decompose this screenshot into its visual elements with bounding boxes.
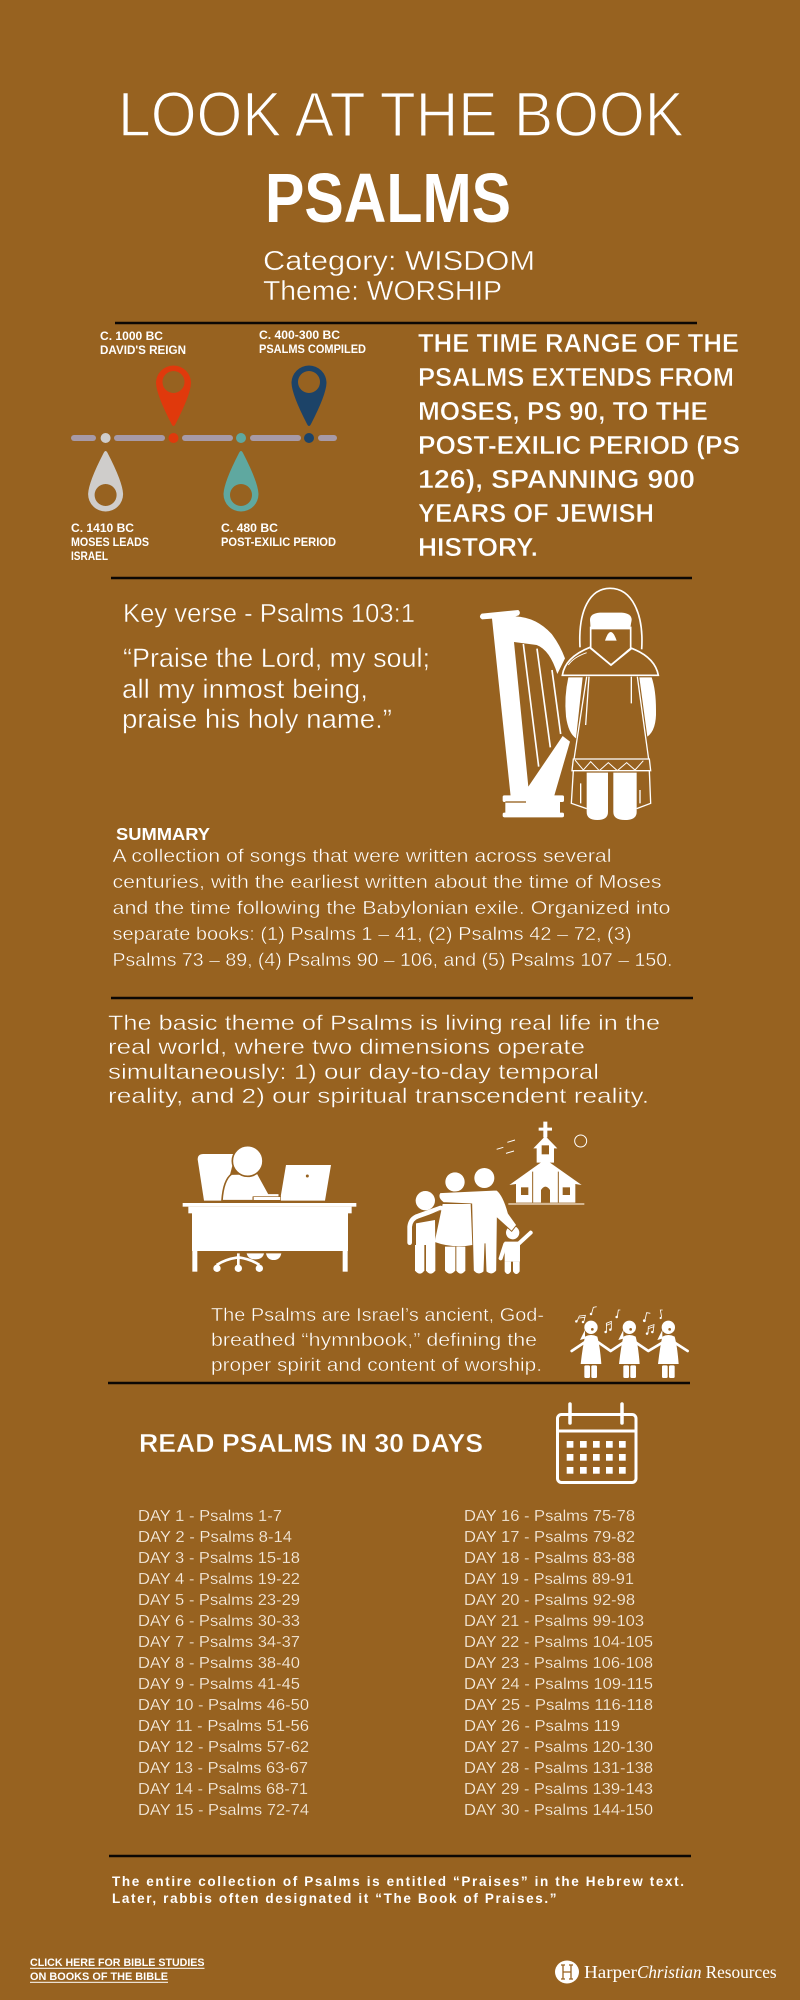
- closing note: Later, rabbis often designated it “The Book of Praises.”: [112, 1891, 556, 1906]
- pin: post-exilic period: [224, 451, 258, 512]
- label: c. 480 bc: POST-EXILIC PERIOD: [221, 537, 336, 549]
- text block: time range: [418, 330, 740, 562]
- closing note: The entire collection of Psalms is entitled “Praises” in the Hebrew text.: [112, 1874, 684, 1889]
- icon: family and church: [410, 1122, 587, 1274]
- panel: timeline: [71, 330, 366, 563]
- summary text: Psalms 73 – 89, (4) Psalms 90 – 106, and (5) Psalms 107 – 150.: [112, 949, 672, 970]
- text block: time range: THE TIME RANGE OF THE: [418, 330, 739, 358]
- timeline bar: [74, 435, 334, 441]
- link: bible studies: ON BOOKS OF THE BIBLE: [30, 1971, 168, 1983]
- reading plan: days 1 to 15: DAY 11 - Psalms 51-56: [138, 1718, 309, 1735]
- reading plan: days 16 to 30: DAY 30 - Psalms 144-150: [464, 1802, 653, 1819]
- label: c. 1410 bc: MOSES LEADS: [71, 537, 149, 549]
- text block: time range: PSALMS EXTENDS FROM: [418, 364, 734, 392]
- key verse quote: [122, 643, 430, 734]
- reading plan: days 1 to 15: DAY 3 - Psalms 15-18: [138, 1550, 300, 1567]
- reading plan: days 1 to 15: DAY 14 - Psalms 68-71: [138, 1781, 308, 1798]
- text block: ancient hymnbook: proper spirit and content of worship.: [211, 1354, 542, 1375]
- reading plan: days 1 to 15: DAY 4 - Psalms 19-22: [138, 1571, 300, 1588]
- summary heading: SUMMARY: [116, 824, 210, 844]
- music notes: [575, 1307, 663, 1334]
- text block: time range: 126), SPANNING 900: [418, 466, 695, 494]
- text block: time range: MOSES, PS 90, TO THE: [418, 398, 708, 426]
- text block: ancient hymnbook: [211, 1304, 544, 1375]
- heading: psalms: PSALMS: [265, 159, 511, 237]
- harp: [480, 610, 570, 817]
- reading plan: days 16 to 30: DAY 28 - Psalms 131-138: [464, 1760, 653, 1777]
- logo: harpercollins christian resources: [555, 1960, 777, 1984]
- label: c. 480 bc: C. 480 BC: [221, 523, 278, 535]
- reading plan: days 16 to 30: DAY 18 - Psalms 83-88: [464, 1550, 635, 1567]
- reading plan: days 1 to 15: DAY 15 - Psalms 72-74: [138, 1802, 309, 1819]
- pin: david's reign: [156, 366, 191, 426]
- label: c. 1410 bc: C. 1410 BC: [71, 523, 134, 535]
- link: bible studies: [30, 1957, 204, 1983]
- label: c. 1410 bc: [71, 523, 149, 563]
- reading plan: days 16 to 30: DAY 20 - Psalms 92-98: [464, 1592, 635, 1609]
- reading plan: days 16 to 30: DAY 27 - Psalms 120-130: [464, 1739, 653, 1756]
- text block: time range: YEARS OF JEWISH: [418, 500, 654, 528]
- icon: person at desk: [183, 1146, 356, 1272]
- logo: harpercollins christian resources: Harper: [584, 1962, 637, 1982]
- label: c. 1410 bc: ISRAEL: [71, 551, 108, 563]
- label: c. 1000 bc: [100, 331, 186, 357]
- reading plan: days 16 to 30: DAY 23 - Psalms 106-108: [464, 1655, 653, 1672]
- reading plan: days 1 to 15: DAY 1 - Psalms 1-7: [138, 1508, 282, 1525]
- summary text: [112, 845, 672, 970]
- text block: basic theme: simultaneously: 1) our day-to-day temporal: [108, 1061, 599, 1084]
- figure: [562, 588, 658, 820]
- reading plan: days 16 to 30: DAY 24 - Psalms 109-115: [464, 1676, 653, 1693]
- pin: moses leads israel: [88, 451, 123, 512]
- reading plan: days 1 to 15: DAY 13 - Psalms 63-67: [138, 1760, 308, 1777]
- reading plan: days 16 to 30: DAY 25 - Psalms 116-118: [464, 1697, 653, 1714]
- label: c. 400-300 bc: C. 400-300 BC: [259, 330, 340, 342]
- key verse heading: Key verse - Psalms 103:1: [123, 600, 415, 628]
- closing note: [112, 1874, 684, 1906]
- family: [410, 1168, 531, 1274]
- category and theme: Theme: WORSHIP: [263, 275, 502, 306]
- key verse quote: “Praise the Lord, my soul;: [123, 643, 430, 673]
- key verse quote: praise his holy name.”: [122, 704, 392, 734]
- reading plan: days 16 to 30: DAY 19 - Psalms 89-91: [464, 1571, 634, 1588]
- category and theme: [263, 245, 535, 306]
- text block: basic theme: real world, where two dimensions operate: [108, 1036, 585, 1059]
- reading plan: days 16 to 30: DAY 22 - Psalms 104-105: [464, 1634, 653, 1651]
- reading plan: days 1 to 15: DAY 5 - Psalms 23-29: [138, 1592, 300, 1609]
- label: c. 1000 bc: C. 1000 BC: [100, 331, 163, 343]
- reading plan: days 1 to 15: DAY 12 - Psalms 57-62: [138, 1739, 309, 1756]
- label: c. 1000 bc: DAVID'S REIGN: [100, 345, 186, 357]
- label: c. 480 bc: [221, 523, 336, 549]
- text block: time range: POST-EXILIC PERIOD (PS: [418, 432, 740, 460]
- reading plan: days 1 to 15: DAY 7 - Psalms 34-37: [138, 1634, 300, 1651]
- category and theme: Category: WISDOM: [263, 245, 535, 276]
- church: [497, 1122, 584, 1205]
- reading plan: days 16 to 30: [464, 1508, 653, 1819]
- reading plan: days 16 to 30: DAY 17 - Psalms 79-82: [464, 1529, 635, 1546]
- logo: harpercollins christian resources: Christian: [637, 1962, 702, 1982]
- reading plan: days 16 to 30: DAY 16 - Psalms 75-78: [464, 1508, 635, 1525]
- reading plan: days 16 to 30: DAY 21 - Psalms 99-103: [464, 1613, 644, 1630]
- icon: three singers: [572, 1307, 688, 1378]
- reading plan: days 1 to 15: DAY 2 - Psalms 8-14: [138, 1529, 292, 1546]
- reading plan: days 1 to 15: DAY 9 - Psalms 41-45: [138, 1676, 300, 1693]
- summary text: A collection of songs that were written across several: [112, 845, 612, 866]
- summary text: centuries, with the earliest written about the time of Moses: [112, 871, 662, 892]
- reading plan: days 1 to 15: DAY 6 - Psalms 30-33: [138, 1613, 300, 1630]
- key verse quote: all my inmost being,: [122, 674, 368, 704]
- label: c. 400-300 bc: [259, 330, 366, 356]
- summary text: separate books: (1) Psalms 1 – 41, (2) Psalms 42 – 72, (3): [112, 923, 632, 944]
- logo: harpercollins christian resources: Resources: [706, 1962, 777, 1982]
- text block: basic theme: The basic theme of Psalms is living real life in the: [108, 1012, 660, 1035]
- timeline dots: [101, 433, 314, 443]
- reading plan: days 1 to 15: DAY 8 - Psalms 38-40: [138, 1655, 300, 1672]
- icon: harpist: [480, 588, 658, 820]
- heading: read psalms in 30 days: READ PSALMS IN 30 DAYS: [139, 1430, 483, 1458]
- icon: calendar: [558, 1404, 636, 1482]
- summary text: and the time following the Babylonian exile. Organized into: [112, 897, 670, 918]
- text block: basic theme: reality, and 2) our spiritual transcendent reality.: [108, 1085, 649, 1108]
- reading plan: days 16 to 30: DAY 29 - Psalms 139-143: [464, 1781, 653, 1798]
- text block: basic theme: [108, 1012, 660, 1108]
- label: c. 400-300 bc: PSALMS COMPILED: [259, 344, 366, 356]
- reading plan: days 16 to 30: DAY 26 - Psalms 119: [464, 1718, 620, 1735]
- text block: ancient hymnbook: The Psalms are Israel’s ancient, God-: [211, 1304, 544, 1325]
- pin: psalms compiled: [292, 366, 326, 426]
- link: bible studies: CLICK HERE FOR BIBLE STUDIES: [30, 1957, 204, 1969]
- reading plan: days 1 to 15: DAY 10 - Psalms 46-50: [138, 1697, 309, 1714]
- reading plan: days 1 to 15: [138, 1508, 309, 1819]
- text block: ancient hymnbook: breathed “hymnbook,” defining the: [211, 1329, 537, 1350]
- text block: time range: HISTORY.: [418, 534, 538, 562]
- title: look at the book: LOOK AT THE BOOK: [118, 80, 684, 150]
